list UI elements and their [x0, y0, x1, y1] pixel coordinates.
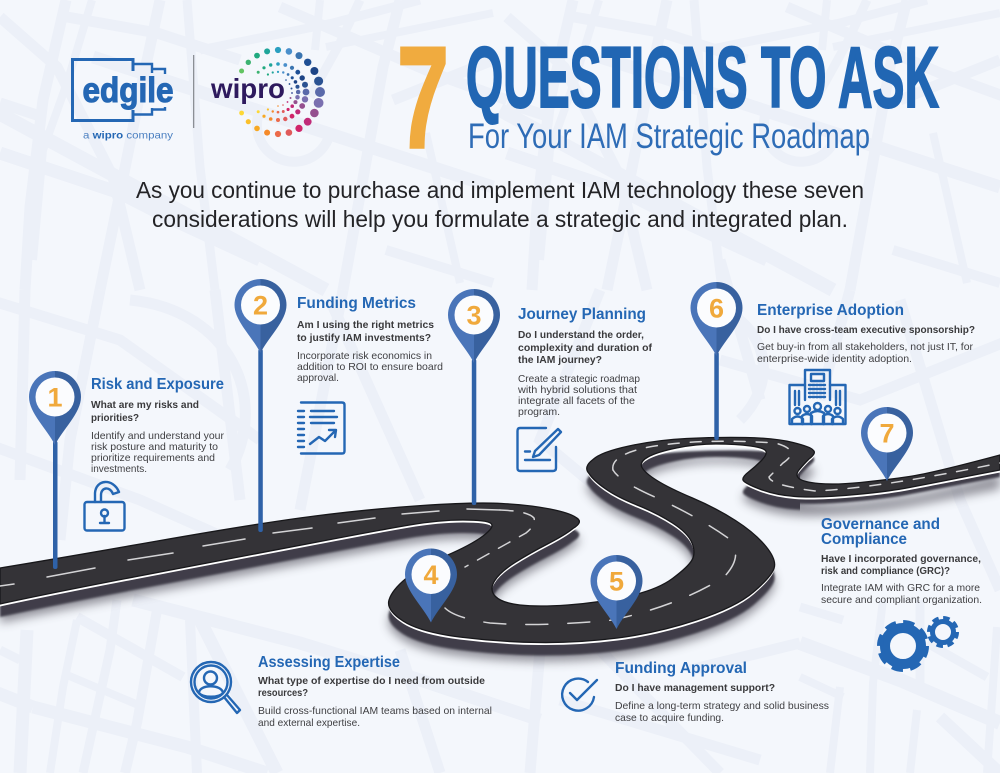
text 4: What type of expertise do I need from outside: [258, 675, 485, 687]
panel: 5 funding approval: [562, 555, 829, 724]
intro text: As you continue to purchase and implement IAM technology these seven: [136, 177, 864, 203]
icon: check mark: [562, 679, 597, 711]
text 2: to justify IAM investments?: [297, 332, 431, 344]
text 7: risk and compliance (GRC)?: [821, 565, 950, 577]
text 4: and external expertise.: [258, 717, 360, 729]
pin 1: [29, 371, 81, 569]
panel: 4 assessing expertise: [191, 548, 492, 729]
text 1: Identify and understand your: [91, 430, 224, 442]
text 1: Risk and Exposure: [91, 376, 224, 393]
text 5: Define a long-term strategy and solid business: [615, 700, 829, 712]
icon: magnifier with person: [191, 662, 240, 713]
text 1: What are my risks and: [91, 399, 199, 411]
text 3: Do I understand the order,: [518, 329, 644, 341]
logo: edgile: a wipro company: [83, 130, 174, 142]
logo: wipro: [210, 47, 325, 137]
text 1: [91, 376, 224, 475]
text 4: Build cross-functional IAM teams based on internal: [258, 705, 492, 717]
subtitle: For Your IAM Strategic Roadmap: [468, 117, 870, 156]
pin 1: 1: [47, 382, 63, 412]
icon: report with trend chart: [298, 402, 344, 454]
panel: 1 risk and exposure: [29, 371, 224, 569]
panel: 2 funding metrics: [234, 279, 443, 532]
icon: office building with people: [790, 370, 846, 424]
text 5: Funding Approval: [615, 660, 747, 677]
text 3: the IAM journey?: [518, 354, 602, 366]
text 6: Get buy-in from all stakeholders, not just IT, for: [757, 341, 973, 353]
text 1: prioritize requirements and: [91, 452, 215, 464]
pin 7: 7: [879, 418, 895, 448]
text 2: Funding Metrics: [297, 295, 416, 312]
pin 6: [690, 282, 742, 440]
pin 7: [861, 407, 913, 481]
text 3: with hybrid solutions that: [517, 384, 637, 396]
winding road: [0, 437, 1000, 662]
text 6: Enterprise Adoption: [757, 302, 904, 319]
text 4: [258, 654, 492, 729]
logo: wipro: wipro: [210, 73, 285, 104]
text 7: Have I incorporated governance,: [821, 553, 981, 565]
text 7: [821, 516, 982, 606]
text 7: Integrate IAM with GRC for a more: [821, 582, 980, 594]
intro text: considerations will help you formulate a strategic and integrated plan.: [152, 206, 848, 232]
text 6: enterprise-wide identity adoption.: [757, 353, 912, 365]
text 5: [615, 660, 829, 724]
icon: open padlock: [84, 482, 124, 530]
text 1: priorities?: [91, 412, 139, 424]
text 5: Do I have management support?: [615, 682, 775, 694]
text 2: [297, 295, 443, 384]
text 1: risk posture and maturity to: [91, 441, 218, 453]
text 2: Am I using the right metrics: [297, 319, 434, 331]
logo: edgile: [72, 60, 174, 142]
text 4: Assessing Expertise: [258, 654, 400, 671]
pin 5: [590, 555, 642, 629]
panel: 6 enterprise adoption: [690, 282, 975, 440]
pin 4: [405, 548, 457, 622]
pin 3: [448, 289, 500, 505]
text 7: secure and compliant organization.: [821, 594, 982, 606]
text 6: Do I have cross-team executive sponsorship?: [757, 324, 975, 336]
pin 2: [234, 279, 286, 532]
text 3: program.: [518, 406, 560, 418]
text 4: resources?: [258, 687, 308, 699]
pin 3: 3: [466, 300, 482, 330]
text 2: approval.: [297, 372, 339, 384]
text 7: Compliance: [821, 531, 907, 548]
text 7: Governance and: [821, 516, 940, 533]
text 2: Incorporate risk economics in: [297, 350, 432, 362]
text 1: investments.: [91, 463, 147, 475]
title: big 7: 7: [397, 16, 449, 178]
intro text: [136, 177, 864, 232]
text 2: addition to ROI to ensure board: [297, 361, 443, 373]
text 6: [757, 302, 975, 365]
pin 5: 5: [609, 566, 624, 596]
panel: 3 journey planning: [448, 289, 652, 505]
text 3: [517, 306, 652, 418]
pin 4: 4: [423, 560, 439, 590]
text 3: Create a strategic roadmap: [518, 373, 640, 385]
text 3: integrate all facets of the: [518, 395, 635, 407]
text 5: case to acquire funding.: [615, 712, 724, 724]
divider between logos: [193, 55, 194, 128]
logo: edgile: edgile: [82, 71, 174, 110]
panel: 7 governance and compliance: [821, 407, 982, 669]
text 3: Journey Planning: [518, 306, 646, 323]
pin 2: 2: [253, 290, 268, 320]
text 3: complexity and duration of: [518, 342, 652, 354]
icon: gears: [880, 618, 957, 669]
icon: pen and paper: [518, 428, 561, 471]
pin 6: 6: [709, 294, 724, 324]
